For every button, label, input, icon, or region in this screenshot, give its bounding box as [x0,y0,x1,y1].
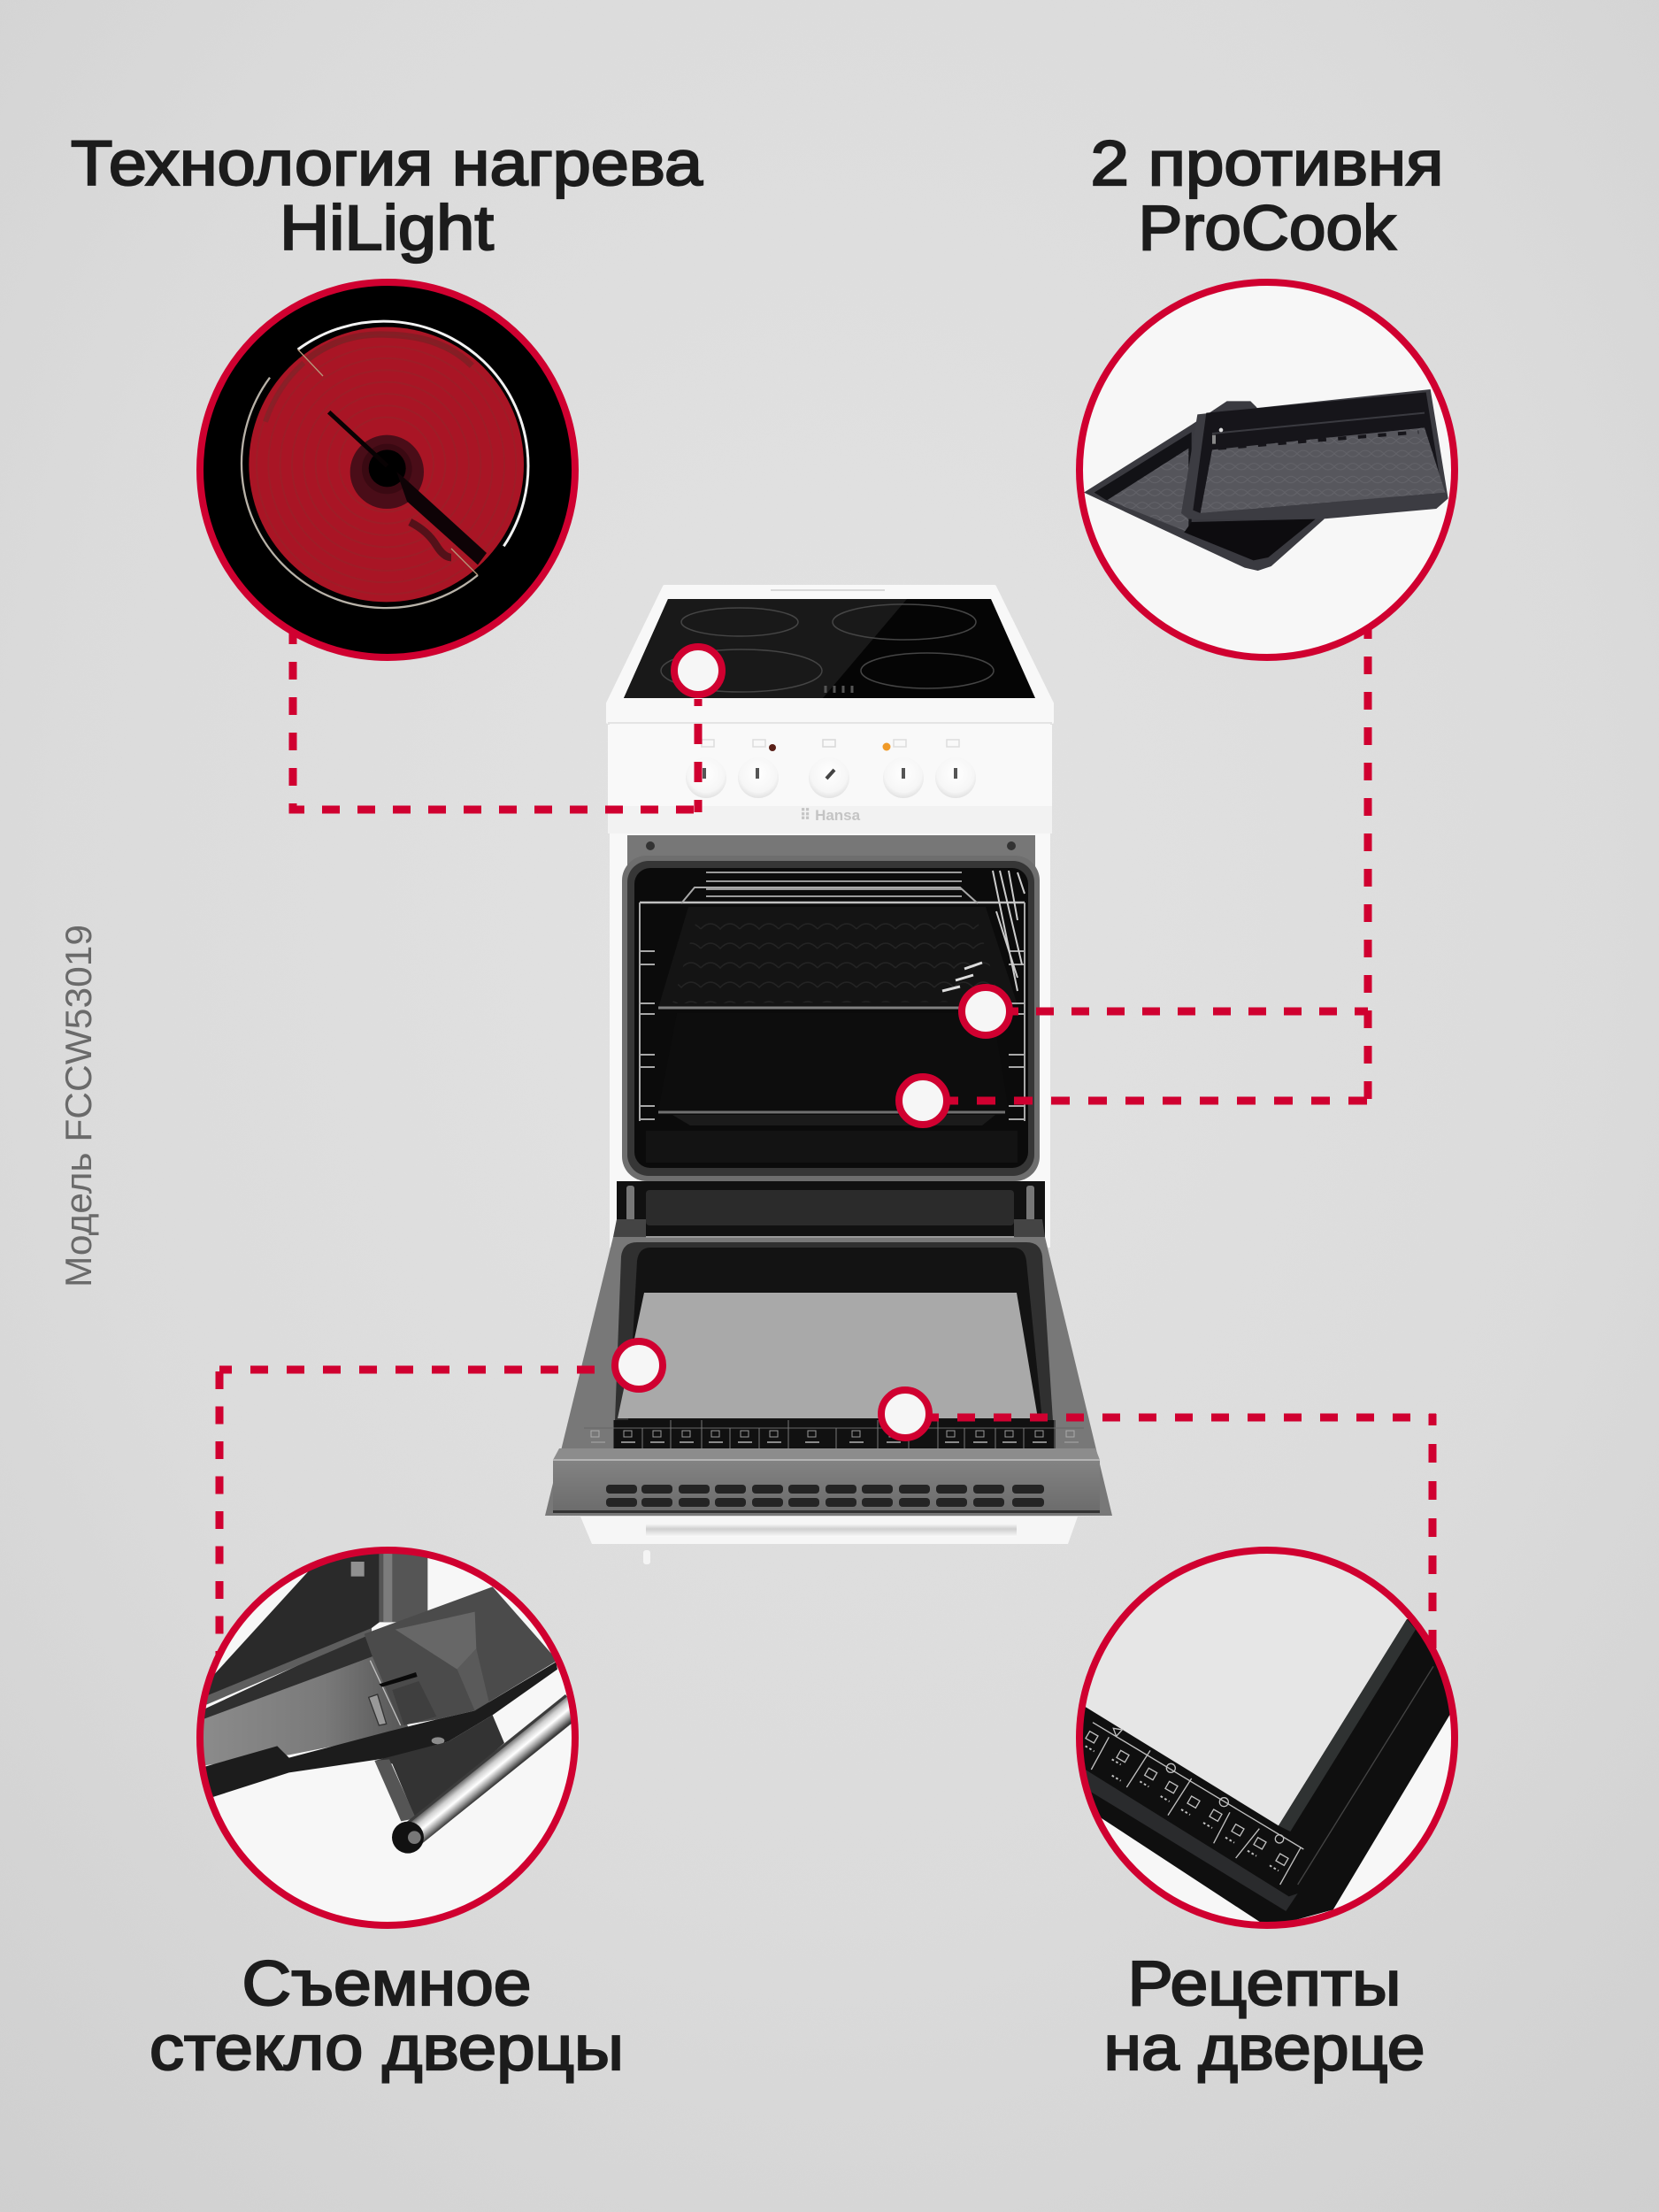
recipes strip [584,1420,1084,1448]
door hinge zone [613,1181,1045,1240]
door vents [606,1485,1044,1507]
heading: HiLight: HiLight [280,194,494,264]
door hinge detail [195,1548,575,1854]
line: recipes horizontal [921,1414,1436,1421]
heading: recipes: на дверце [1104,2014,1425,2084]
white stove body [610,717,1050,1248]
heading: recipes: Рецепты [1127,1949,1402,2019]
heading: recipes [1104,1949,1425,2084]
open oven door [545,1237,1112,1516]
control panel [608,723,1052,833]
heading: removable glass [150,1949,624,2084]
circle: removable door glass [195,1548,575,1925]
cooktop surround [608,587,1052,722]
heading: removable glass: Съемное [242,1949,531,2019]
stove illustration [545,587,1112,1564]
callout lines [219,621,1436,1655]
door ledge [553,1448,1100,1460]
lower baking tray [658,1013,1009,1125]
line: HiLight [293,626,702,810]
control panel: ⠿ Hansa [800,807,861,824]
circle: baking trays [1079,282,1455,657]
line: removable glass vertical [216,1370,223,1655]
removable glass [618,1293,1038,1418]
marker: cooktop [674,647,722,695]
door recipes detail [1083,1554,1449,1922]
circle: HiLight burner [200,282,575,657]
upper baking tray [658,907,1018,1008]
oven cavity [622,856,1040,1181]
marker: lower tray [899,1077,947,1125]
line: recipes vertical [1428,1414,1437,1651]
heading: HiLight: Технология нагрева [71,129,703,199]
line: trays vertical [1364,621,1371,1104]
heading: HiLight [71,129,703,264]
heading: trays: ProCook [1138,194,1396,264]
oven racks [640,871,1025,1121]
line: removable glass horizontal [219,1366,624,1373]
markers [615,647,1010,1438]
heading: removable glass: стекло дверцы [150,2014,624,2084]
marker: recipes [881,1390,929,1438]
oven gray frame [627,835,1035,875]
model label: Модель FCCW53019 [58,925,99,1287]
heading: trays [1090,129,1444,264]
glass cooktop [624,599,1035,698]
burner detail [242,321,528,608]
line: HiLight marker [694,699,703,812]
door handle and base [580,1517,1078,1564]
circle: recipes on door [1076,1547,1458,1929]
line: upper tray [1001,1007,1368,1016]
marker: glass [615,1341,663,1389]
trays detail [1084,389,1448,571]
marker: upper tray [962,987,1010,1035]
line: lower tray [940,1097,1368,1104]
heading: trays: 2 противня [1090,129,1444,199]
